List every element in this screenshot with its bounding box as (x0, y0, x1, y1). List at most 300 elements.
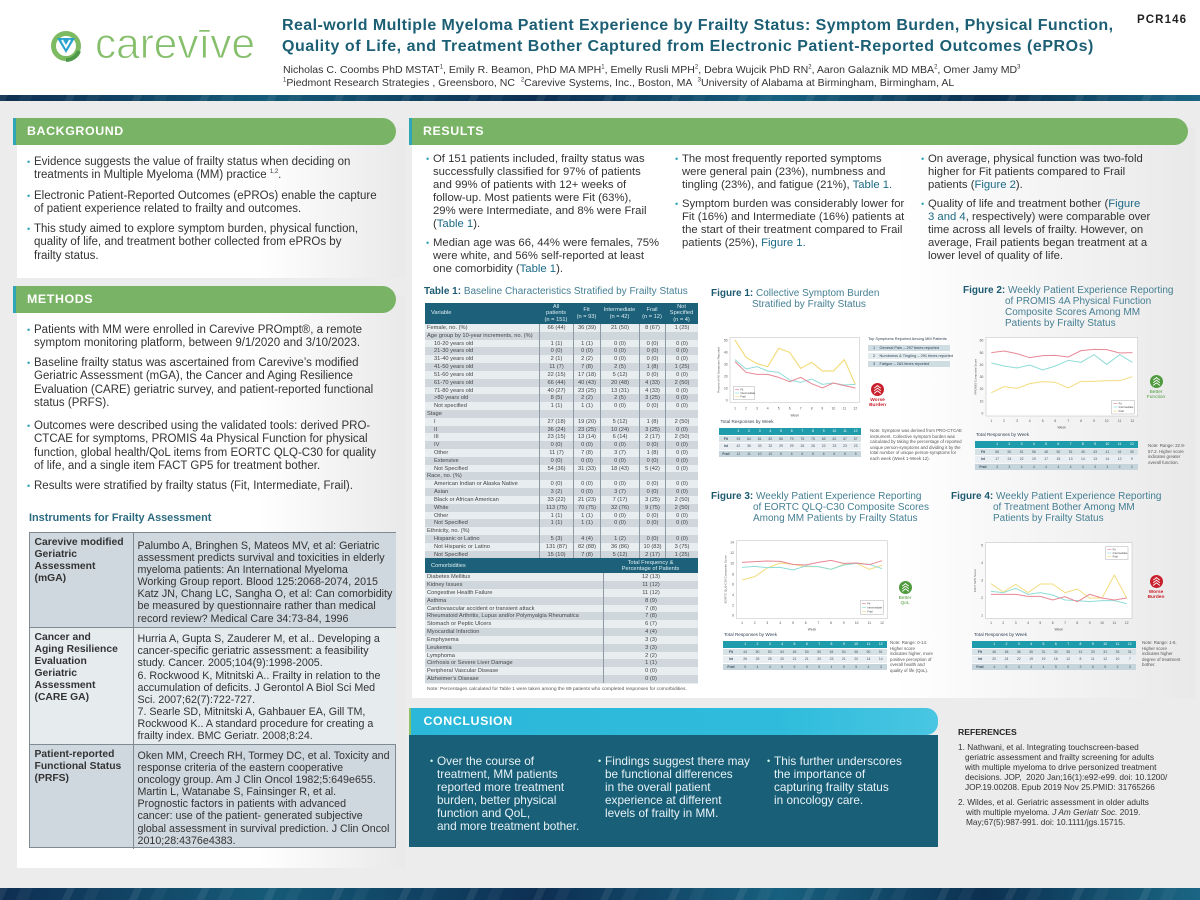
table 1: baseline characteristics: 3 (7) (614, 450, 626, 456)
icon: worse burden figure 4 (1148, 575, 1164, 600)
table 1: baseline characteristics: 1 (8) (647, 450, 658, 456)
figure 3 responses table: 4 (868, 665, 869, 669)
figure 4 chart: Week (1054, 627, 1063, 631)
figure 3 responses table: 14 (867, 657, 870, 661)
figure 3 note: quality of life (QoL). (890, 668, 928, 672)
table: frailty instruments: myeloma patients: An International Myeloma (138, 564, 348, 576)
table 1: baseline characteristics: 9 (75) (645, 505, 660, 511)
figure 3 responses table: 20 (780, 657, 784, 661)
figure 2 responses table: 2 (1008, 442, 1010, 446)
table: frailty instruments: global assessment in survival prediction. J Clin Oncol (138, 823, 389, 835)
table 1: baseline characteristics: 5 (12) (613, 372, 627, 378)
table: frailty instruments: Katz JN, Chang LC, Sangha O, et al: Can comorbidity (138, 588, 392, 600)
figure 1 responses table: 1 (737, 429, 739, 433)
results text column 2: the start of their treatment compared to Frail (682, 224, 902, 236)
table 1: baseline characteristics: Myocardial Infarction (427, 629, 479, 635)
figure 4 responses table: Frail (976, 665, 984, 669)
figure 3 responses table: 5 (806, 665, 808, 669)
figure 1 responses table: 29 (779, 444, 783, 448)
figure 2 chart: 9 (1093, 419, 1095, 423)
figure 2 responses table: 12 (1118, 457, 1122, 461)
table 1: baseline characteristics: 5 (3) (551, 536, 562, 542)
figure 4 responses table: 9 (1092, 642, 1094, 646)
methods text: Evaluation (CARE) geriatric survey, and patient-reported functional (34, 384, 373, 396)
table 1: baseline characteristics: 27 (18) (547, 419, 566, 425)
conclusion text: the importance of (774, 767, 865, 781)
legend: Fit (867, 601, 871, 605)
figure 1 responses table: 4 (769, 429, 771, 433)
figure 4 responses table: 16 (1054, 657, 1058, 661)
figure 2 responses table: Fit (981, 450, 985, 454)
figure 1 note: total number of unique person-symptoms for (870, 450, 956, 455)
figure 2 chart: 5 (1042, 419, 1044, 423)
figure 2 chart: Week (1057, 425, 1066, 429)
figure 3 responses table: 5 (855, 665, 857, 669)
figure 3 chart: 4 (779, 621, 781, 625)
figure 4 responses table: Int (978, 657, 982, 661)
figure 4 responses table: 8 (1080, 657, 1081, 661)
figure 4 note: indicates higher (1142, 651, 1173, 656)
table 1: baseline characteristics: 0 (0) (647, 403, 658, 409)
figure 4 responses table: 24 (1005, 657, 1008, 661)
table 1: baseline characteristics: Cirrhosis or Severe Liver Damage (427, 660, 513, 666)
table 1: baseline characteristics: 40 (43) (578, 380, 596, 386)
table 1: baseline characteristics: 11 (12) (642, 582, 660, 588)
line: frail (991, 377, 1132, 393)
figure 1 responses table: 26 (800, 444, 804, 448)
figure 3 chart: 0 (732, 614, 734, 618)
comorbidities header row: Total Frequency & (628, 560, 673, 566)
table 1 header row: Fit (583, 307, 590, 313)
figure 3 title: Figure 3: Weekly Patient Experience Reporting (711, 491, 921, 502)
results text column 3 (921, 153, 1150, 262)
figure 4 chart: 3 (1015, 621, 1017, 625)
table: frailty instruments: Functional Status (34, 761, 121, 772)
text: • (430, 756, 433, 766)
text: • (27, 421, 30, 431)
figure 3 note: overall health and (890, 662, 925, 667)
table 1: baseline characteristics: 1 (1) (551, 520, 562, 526)
table 1 header row: Frail (646, 307, 658, 313)
conclusion text: experience at different (605, 793, 722, 807)
reference 1 (958, 742, 1168, 792)
figure 4 chart: 2 (1002, 621, 1004, 625)
table 1: baseline characteristics: 2 (50) (675, 419, 689, 425)
table 1: baseline characteristics: 11 (12) (642, 590, 660, 596)
figure 4 note (1142, 640, 1180, 667)
header band (0, 95, 1200, 101)
figure 2 responses table: 3 (1021, 442, 1023, 446)
figure 4 responses table: 34 (1054, 650, 1058, 654)
table 1: baseline characteristics: White (434, 505, 449, 511)
results text column 1: Of 151 patients included, frailty status was (433, 153, 645, 165)
figure 1 title (711, 288, 879, 310)
figure 1 responses table: 22 (822, 444, 826, 448)
figure 4 responses table: 36 (1017, 650, 1021, 654)
panel: background (17, 128, 405, 278)
figure 3 responses table: 2 (757, 642, 758, 646)
table: frailty instruments: Cancer and (34, 632, 91, 642)
table 1: baseline characteristics: 1 (1) (551, 341, 562, 347)
table 1: baseline characteristics: Stage (427, 411, 442, 417)
table 1: baseline characteristics: 2 (2) (581, 356, 593, 362)
table 1: baseline characteristics: Leukemia (427, 645, 452, 651)
figure 3 responses table: 25 (756, 657, 759, 661)
figure 1 responses table: 86 (779, 437, 783, 441)
figure 4 responses table: 41 (1079, 650, 1082, 654)
figure 3 responses table: 3 (880, 665, 882, 669)
figure 1 responses table: 6 (791, 429, 793, 433)
text: • (426, 154, 429, 164)
conclusion text: be functional differences (605, 767, 733, 781)
figure 4 chart: 11 (1113, 621, 1116, 625)
table 1: baseline characteristics: 0 (0) (581, 481, 593, 487)
figure 4 responses table: 33 (1091, 650, 1095, 654)
figure 3 responses table: 5 (794, 665, 795, 669)
table 1: baseline characteristics: 70 (75) (578, 505, 596, 511)
icon: better function: Function (1147, 395, 1165, 400)
figure 1 note: each week (Week 1-Week 12). (870, 456, 930, 460)
figure 1 responses table: 65 (822, 437, 826, 441)
results text column 2 (675, 153, 904, 249)
methods text: Baseline frailty status was ascertained from Carevive’s modified (34, 357, 358, 369)
table: frailty instruments: (CARE GA) (34, 692, 89, 703)
figure 1 responses table: 10 (768, 452, 772, 456)
figure 4 responses table: 20 (992, 657, 996, 661)
figure 3 responses table: 26 (743, 657, 747, 661)
table 1: baseline characteristics: 0 (0) (614, 348, 626, 354)
reference 1: 1. Nathwani, et al. Integrating touchscreen-based (958, 742, 1139, 752)
table 1: baseline characteristics: 2 (50) (675, 380, 689, 386)
figure 2 responses table: 43 (1093, 450, 1097, 454)
table 1: baseline characteristics: Age group by 10-year increments, no. (%) (427, 333, 533, 339)
table 1: baseline characteristics: 13 (14) (578, 434, 596, 440)
table 1: baseline characteristics: Black or African American (434, 497, 499, 503)
heading: background (13, 118, 396, 145)
table 1: baseline characteristics: 0 (0) (676, 356, 688, 362)
legend: Intermediate (867, 605, 883, 609)
figure 2 responses table: 17 (995, 457, 999, 461)
figure 2 responses table: 3 (996, 465, 998, 469)
conclusion text: This further underscores (774, 754, 902, 768)
figure 1 responses table: 62 (832, 437, 836, 441)
figure 2 chart: 1 (990, 419, 992, 423)
table 1: baseline characteristics: 0 (0) (551, 442, 562, 448)
figure 2 responses table: 41 (1105, 450, 1109, 454)
legend: Frail (740, 395, 746, 399)
icon: worse burden figure 1: Worse (870, 398, 885, 402)
icon: better QoL: QoL (900, 601, 910, 606)
figure 1 chart: 11 (843, 406, 846, 410)
figure 1 responses table: 5 (855, 452, 857, 456)
background text: quality of life, and treatment bother collected from ePROs by (34, 236, 341, 248)
figure 1 top symptoms list: 2 Numbness & Tingling – 291 times reported (873, 353, 953, 358)
table 1: baseline characteristics: 10-20 years old (434, 341, 473, 347)
figure 4 responses table: 5 (1104, 665, 1106, 669)
table 1: baseline characteristics: 0 (0) (614, 442, 626, 448)
table 1: baseline characteristics: Extensive (434, 458, 459, 464)
figure 2 responses table: 4 (1070, 465, 1072, 469)
figure 4 responses table: 46 (992, 650, 996, 654)
table 1: baseline characteristics: Ethnicity, no. (%) (427, 528, 470, 534)
results text column 1: 29% were Intermediate, and 8% were Frail (433, 205, 646, 217)
table 1: baseline characteristics: Not Specified (434, 466, 468, 472)
figure 1 responses table: 93 (736, 437, 740, 441)
table 1: baseline characteristics: 20 (48) (611, 380, 629, 386)
table 1: baseline characteristics: 2 (17) (645, 434, 660, 440)
table: frailty instruments: study. Cancer. 2005;104(9):1998-2005. (138, 657, 323, 669)
figure 1 title: Stratified by Frailty Status (752, 299, 866, 310)
table 1: baseline characteristics: 71-80 years old (434, 388, 473, 394)
table: frailty instruments: cancer-specific geriatric assessment: a feasibility (138, 645, 369, 657)
table 1: baseline characteristics: Other (434, 512, 448, 518)
figure 4 chart: 1 (981, 613, 983, 617)
figure 4 chart: 7 (1064, 621, 1066, 625)
figure 1 responses table: 11 (747, 452, 751, 456)
figure 4 responses table: 7 (1067, 642, 1069, 646)
figure 4 title: Figure 4: Weekly Patient Experience Reporting (951, 491, 1161, 502)
table: frailty instruments: Oken MM, Creech RH, Tormey DC, et al. Toxicity and (138, 750, 390, 762)
poster number: PCR146 (1137, 14, 1187, 26)
line: frail (991, 575, 1127, 598)
methods text: status (PRFS). (34, 397, 109, 409)
figure 4 responses table: 11 (1091, 657, 1095, 661)
figure 1 responses table: Fit (724, 437, 728, 441)
reference 2: May;67(5):987-991. doi: 10.1111/jgs.15715. (966, 817, 1125, 827)
legend (860, 600, 883, 614)
table 1: baseline characteristics: 21 (23) (578, 497, 596, 503)
table 1: baseline characteristics: 23 (25) (578, 427, 596, 433)
table 1 note: Note: Percentages calculated for Table 1 were taken among the 89 patients who completed responses for comorbidities. (427, 687, 687, 692)
table 1: baseline characteristics: II (434, 427, 437, 433)
figure 2 responses table: 48 (1044, 450, 1048, 454)
figure 4 responses table: 22 (1017, 657, 1021, 661)
table 1 header row: Intermediate (604, 307, 635, 313)
figure 4 title (951, 491, 1161, 524)
table 1: baseline characteristics: 11 (7) (549, 364, 564, 370)
table 1: baseline characteristics: 36 (24) (547, 427, 566, 433)
figure 2 title: of PROMIS 4A Physical Function (1005, 296, 1151, 307)
figure 2 responses table: 3 (1094, 465, 1096, 469)
table 1: baseline characteristics: 0 (0) (581, 458, 593, 464)
text: • (921, 154, 924, 164)
figure 4 note: Note: Range: 1-6. (1142, 640, 1177, 645)
figure 1 responses table: 75 (811, 437, 815, 441)
reference 2 (958, 797, 1149, 827)
table 1: baseline characteristics: 0 (0) (676, 388, 688, 394)
results text column 2: patients (25%), Figure 1. (682, 237, 806, 249)
figure 1 responses table: 12 (736, 452, 740, 456)
figure 1 chart: 7 (800, 406, 802, 410)
figure 2 responses table: 56 (1032, 450, 1036, 454)
icon: worse burden figure 4: Burden (1148, 595, 1164, 600)
figure 2 chart: 3 (1016, 419, 1018, 423)
table 1: baseline characteristics: 4 (4) (645, 629, 657, 635)
figure 2 responses table: 4 (1033, 442, 1035, 446)
figure 3 responses table: 20 (817, 657, 821, 661)
figure 4 responses table: 5 (1092, 665, 1094, 669)
figure 3 responses table: 23 (830, 657, 833, 661)
table 1: baseline characteristics: 1 (1) (551, 512, 562, 518)
figure 1 note: instrument. Collective symptom burden was (870, 434, 955, 438)
figure 4 responses table (972, 641, 1136, 670)
figure 4 chart: 2 (981, 596, 983, 600)
table 1 header row: All (553, 304, 559, 310)
results text column 2: tingling (23%), and fatigue (21%), Table 1. (682, 179, 892, 191)
table 1: baseline characteristics: 7 (8) (581, 450, 593, 456)
results text column 1: follow-up. Most patients were Fit (63%), (433, 192, 631, 204)
figure 1 note: Note: Symptom was derived from PRO-CTCAE (870, 428, 962, 433)
table 1: baseline characteristics: 0 (0) (676, 442, 688, 448)
table: frailty instruments: (PRFS) (34, 773, 69, 784)
figure 3 responses table: 44 (743, 650, 747, 654)
table 1: baseline characteristics: 0 (0) (676, 536, 688, 542)
figure 3 chart: 9 (843, 621, 845, 625)
table: frailty instruments (29, 532, 396, 848)
table: frailty instruments: Carevive modified (34, 536, 124, 548)
methods text (27, 324, 376, 492)
table 1: baseline characteristics: 0 (0) (647, 489, 658, 495)
figure 2 responses table: 3 (1106, 465, 1108, 469)
figure 2 chart: 6 (1054, 419, 1056, 423)
table 1: baseline characteristics: Hispanic or Latino (434, 536, 480, 542)
figure 3 responses table: 46 (854, 650, 858, 654)
results text column 1: Median age was 66, 44% were females, 75% (433, 237, 659, 249)
figure 2 chart: 11 (1118, 419, 1122, 423)
methods text: function, global health/QoL items from EORTC QLQ-C30 for quality (34, 447, 376, 459)
table 1: baseline characteristics: 5 (42) (645, 466, 660, 472)
table 1: baseline characteristics: 0 (0) (676, 427, 688, 433)
figure 3 responses table: 5 (794, 642, 795, 646)
table 1 heading: Table 1: Baseline Characteristics Stratified by Frailty Status (424, 286, 688, 297)
table 1: baseline characteristics: Female, no. (%) (427, 325, 467, 331)
references (958, 727, 1168, 827)
text: • (27, 325, 30, 335)
figure 4 responses table: 4 (1030, 665, 1032, 669)
figure 3 note (890, 640, 933, 673)
figure 2 responses table: 4 (1057, 465, 1059, 469)
icon: worse burden figure 1 (869, 383, 886, 408)
table 1: baseline characteristics: 1 (1) (581, 341, 593, 347)
figure 2 chart: PROMIS Composite Score (973, 359, 977, 395)
figure 4 chart (973, 542, 1132, 631)
table 1: baseline characteristics: 1 (25) (675, 552, 689, 558)
figure 4 responses table: 5 (1067, 665, 1069, 669)
figure 2 responses table: 4 (1033, 465, 1035, 469)
table 1: baseline characteristics: 54 (36) (547, 466, 566, 472)
table 1: baseline characteristics: 0 (0) (645, 676, 657, 682)
table 1: baseline characteristics: 15 (10) (547, 552, 566, 558)
table 1: baseline characteristics: 0 (0) (676, 341, 688, 347)
table 1: baseline characteristics: 0 (0) (676, 450, 688, 456)
conclusion text: • (598, 756, 601, 766)
figure 4 responses table: 4 (1018, 665, 1020, 669)
table 1: baseline characteristics: 0 (0) (614, 481, 626, 487)
line: fit (742, 560, 882, 565)
figure 1 top symptoms list (868, 336, 953, 367)
figure 2 responses table: 1 (996, 442, 998, 446)
table 1: baseline characteristics: 3 (3) (645, 645, 657, 651)
figure 3 responses label: Total Responses by Week (724, 632, 777, 637)
figure 4 responses table: 3 (1018, 642, 1020, 646)
table: frailty instruments: Rockwood K.. A standard procedure for creating a (138, 718, 373, 730)
text: • (675, 154, 678, 164)
heading: instruments for frailty assessment: Instruments for Frailty Assessment (29, 512, 211, 524)
authors and affiliations (283, 64, 1020, 89)
figure 4 responses table: 6 (1055, 642, 1057, 646)
table 1: baseline characteristics: 4 (33) (645, 380, 660, 386)
figure 1 responses table: 79 (790, 437, 794, 441)
table 1: baseline characteristics: 0 (0) (614, 356, 626, 362)
legend: Frail (1113, 555, 1118, 559)
figure 1 responses table: 2 (748, 429, 750, 433)
figure 2 chart (973, 337, 1138, 429)
table 1: baseline characteristics: 1 (25) (675, 325, 689, 331)
figure 1 responses table: 7 (801, 429, 803, 433)
figure 4 responses table: 1 (993, 642, 995, 646)
line: fit (991, 594, 1127, 602)
conclusion text: and more treatment bother. (437, 819, 579, 833)
table 1: baseline characteristics: 10 (24) (611, 427, 629, 433)
table 1: baseline characteristics: 1 (8) (647, 364, 658, 370)
figure 2 chart: 2 (1003, 419, 1005, 423)
figure 4 responses table: 11 (1116, 642, 1119, 646)
table: frailty instruments: Hurria A, Gupta S, Zauderer M, et al.. Developing a (138, 633, 380, 645)
table 1 header row: patients (546, 310, 566, 316)
figure 1 note: calculated by taking the percentage of reported (870, 439, 962, 444)
results text column 3: patients (Figure 2). (928, 179, 1023, 191)
table 1: baseline characteristics: 13 (31) (611, 388, 629, 394)
table: frailty instruments: assessment predicts survival and toxicities in elderly (138, 552, 385, 564)
results text column 2: Fit (16%) and Intermediate (16%) patients at (682, 211, 904, 223)
line: intermediate (742, 563, 882, 570)
results text column 1: and 99% of patients with 12+ weeks of (433, 179, 626, 191)
table 1: baseline characteristics: 4 (4) (581, 536, 593, 542)
figure 3 note: Note: Range: 0-14. (890, 640, 927, 645)
figure 4 note: bother. (1142, 662, 1155, 667)
table: frailty instruments: frailty index. BMC Geriatr. 2008;8:24. (138, 730, 313, 742)
figure 3 responses table: 14 (879, 657, 883, 661)
figure 1 chart: 0 (726, 399, 728, 403)
table 1: baseline characteristics: 36 (86) (611, 544, 629, 550)
figure 2 responses table: 56 (995, 450, 999, 454)
figure 4 responses table: 12 (1103, 657, 1107, 661)
table 1: baseline characteristics: 0 (0) (676, 481, 688, 487)
figure 3 responses table: 4 (831, 665, 832, 669)
table 1: baseline characteristics: Emphysema (427, 637, 459, 643)
figure 3 title: of EORTC QLQ-C30 Composite Scores (753, 502, 929, 513)
text: • (426, 238, 429, 248)
table 1: baseline characteristics: 3 (25) (645, 395, 660, 401)
table 1: baseline characteristics: 0 (0) (551, 458, 562, 464)
table 1: baseline characteristics: 8 (5) (551, 395, 562, 401)
panel: methods (17, 295, 405, 868)
figure 1 top symptoms list: 3 Fatigue – 263 times reported (873, 360, 929, 366)
table 1: baseline characteristics: 5 (12) (613, 419, 627, 425)
table: frailty instruments: Patient-reported (34, 748, 114, 760)
table: frailty instruments: accumulation of deficits. J Gerontol A Biol Sci Med (138, 682, 375, 694)
title: Quality of Life, and Treatment Bother Captured from Electronic Patient-Reported Outcomes (ePROs) (282, 38, 1094, 54)
figure 1 responses table: 6 (833, 452, 835, 456)
table: frailty instruments: Sci. 2007;62(7):722-727. (138, 694, 255, 706)
table 1: baseline characteristics: 7 (8) (645, 613, 657, 619)
figure 1 responses table: 57 (843, 437, 847, 441)
figure 2 responses table: 4 (1045, 465, 1047, 469)
legend: Fit (1119, 401, 1122, 405)
figure 4 responses table: 7 (1129, 657, 1131, 661)
figure 4 responses label: Total Responses by Week (974, 632, 1027, 637)
figure 4 responses table: 19 (1042, 657, 1045, 661)
